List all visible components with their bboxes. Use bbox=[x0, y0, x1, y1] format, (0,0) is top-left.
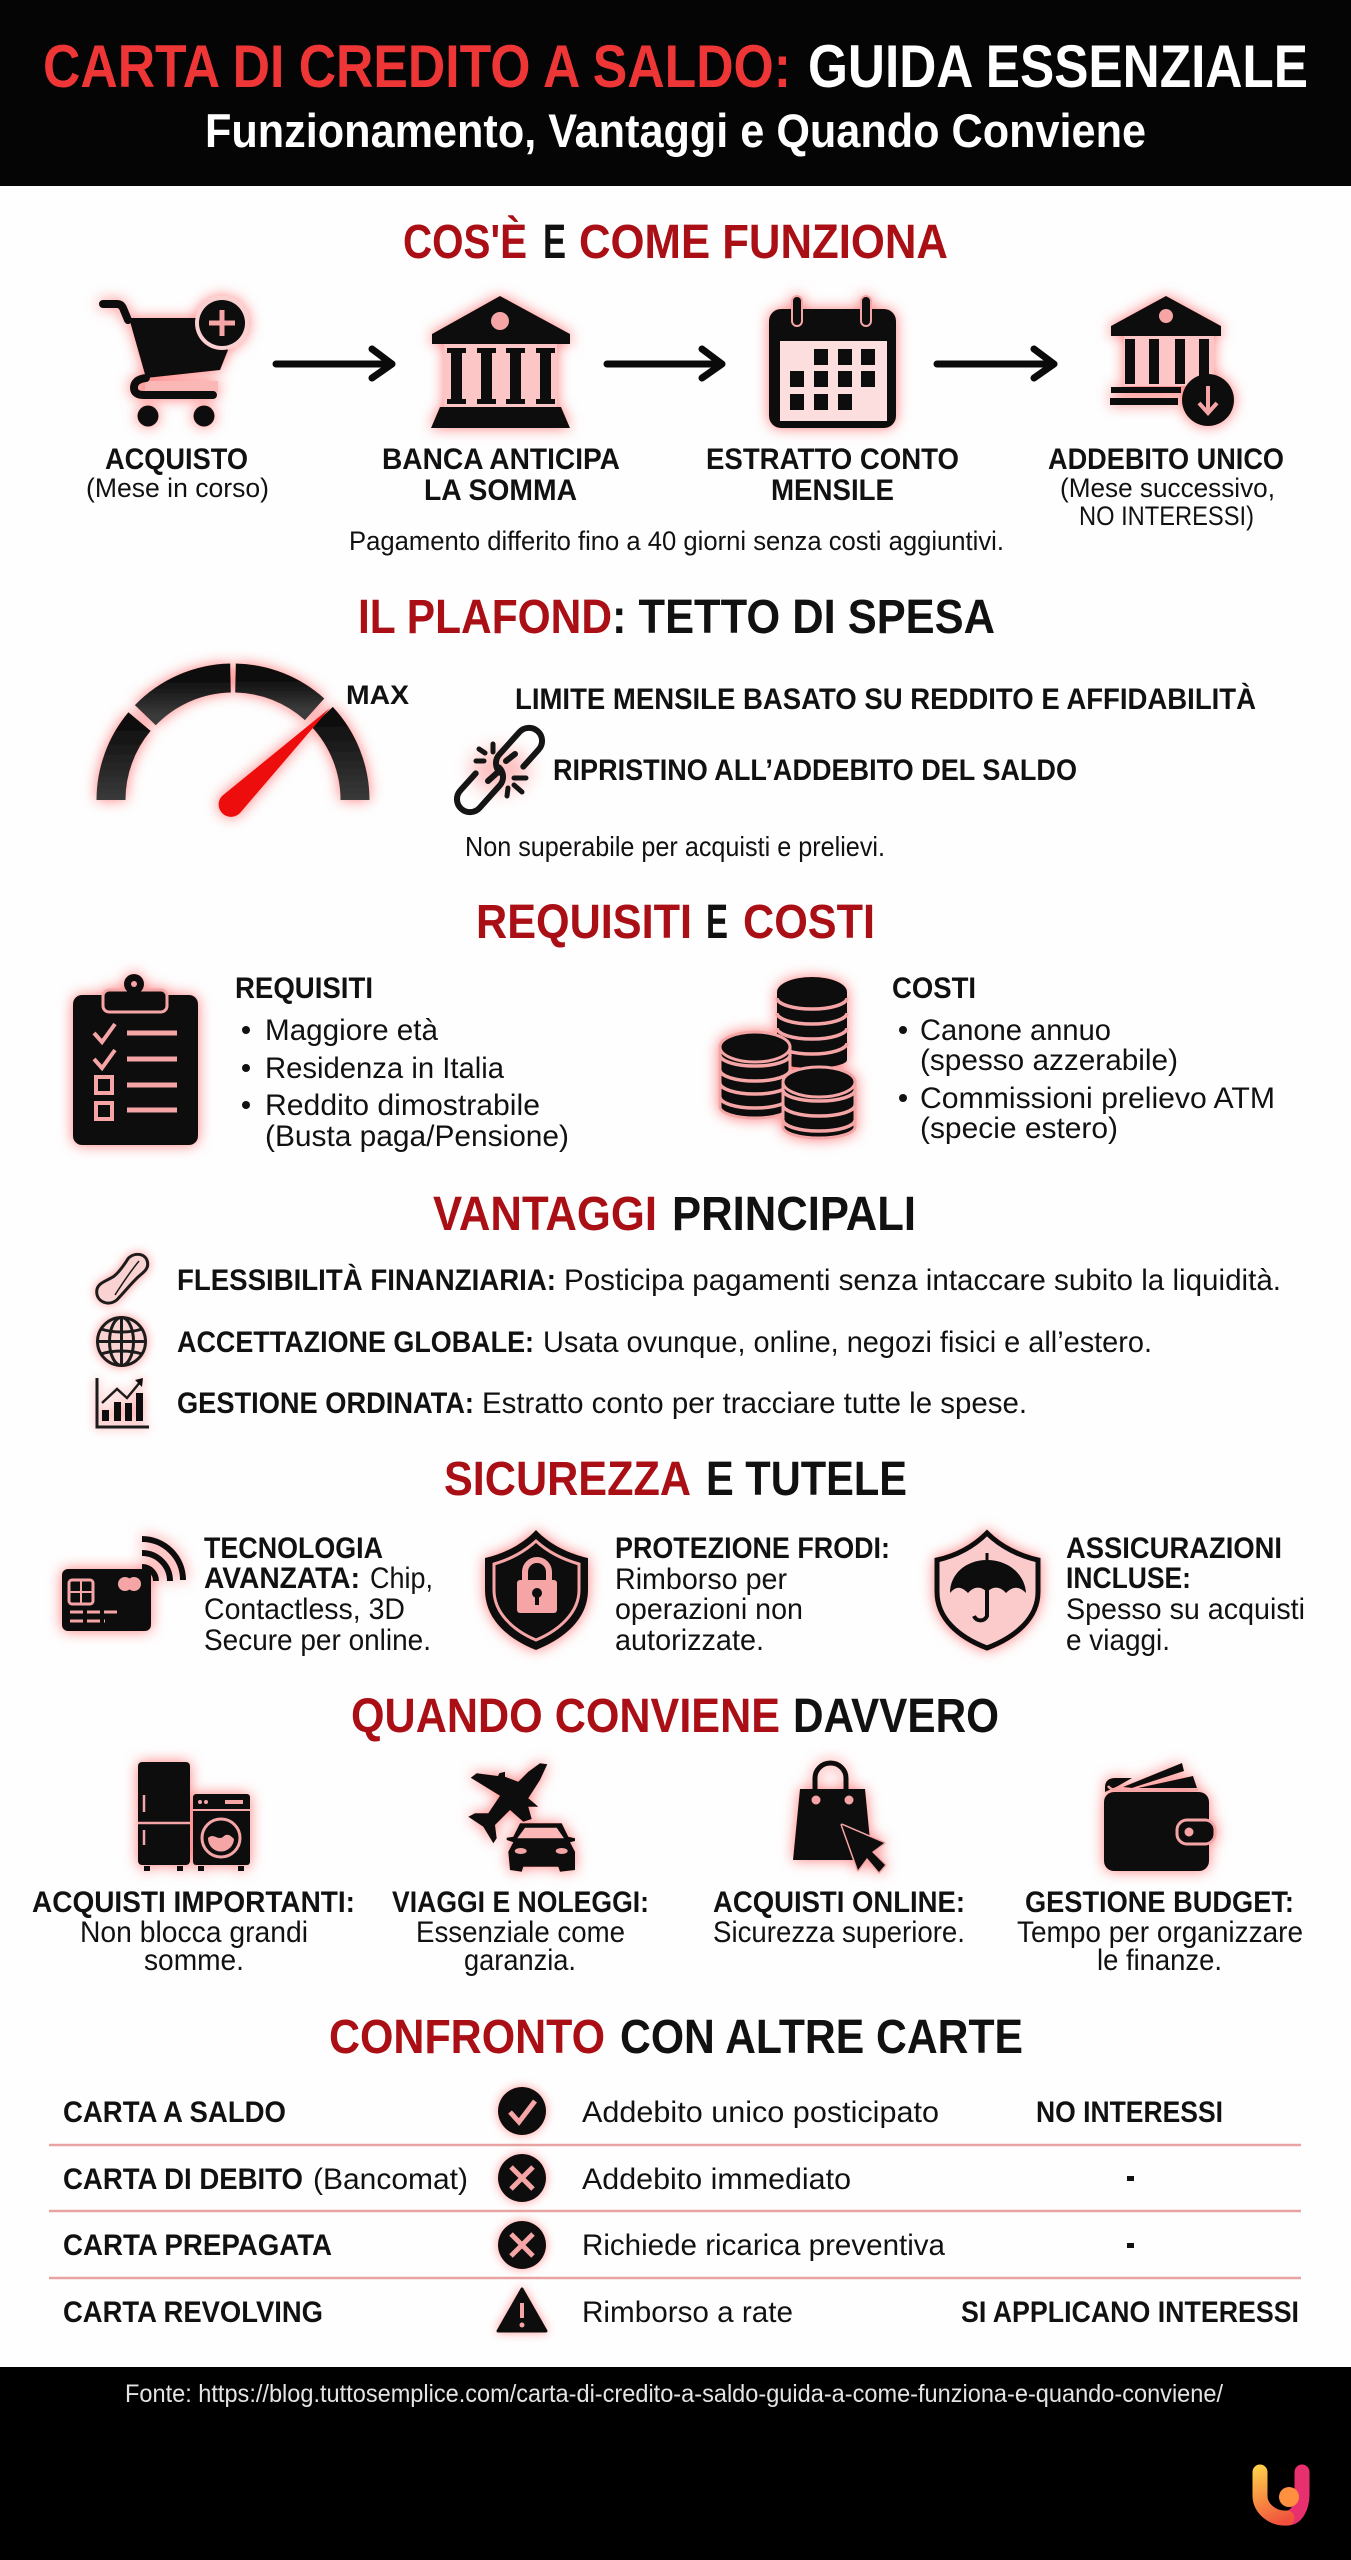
arrow bbox=[607, 349, 722, 378]
icon: bank with debit arrow bbox=[1110, 296, 1234, 426]
caption: acquisti importanti: ACQUISTI IMPORTANTI: bbox=[32, 1886, 355, 1919]
heading: plafond: : TETTO DI SPESA bbox=[612, 591, 995, 644]
icon: clipboard bbox=[73, 974, 198, 1145]
caption: acquisti online: Sicurezza superiore. bbox=[713, 1916, 965, 1949]
row: carta revolving bbox=[63, 2289, 1299, 2331]
icon: appliances bbox=[138, 1762, 250, 1871]
heading: sicurezza: SICUREZZA bbox=[444, 1453, 691, 1506]
costi list: Canone annuo bbox=[920, 1014, 1111, 1047]
caption: viaggi: garanzia. bbox=[464, 1944, 576, 1977]
requisiti list: Reddito dimostrabile bbox=[265, 1089, 540, 1122]
step: banca anticipa: LA SOMMA bbox=[424, 474, 577, 507]
heading: come funziona bbox=[403, 215, 948, 269]
step: addebito unico: (Mese successivo, bbox=[1060, 473, 1275, 503]
text: assicurazioni bbox=[1066, 1532, 1305, 1657]
step: estratto conto bbox=[706, 443, 959, 507]
text: tecnologia: AVANZATA: bbox=[204, 1562, 360, 1595]
heading: plafond: IL PLAFOND bbox=[358, 591, 612, 644]
heading: confronto bbox=[329, 2011, 1023, 2064]
caption: acquisti online: ACQUISTI ONLINE: bbox=[713, 1886, 965, 1919]
section: vantaggi bbox=[97, 1188, 1281, 1427]
row: carta a saldo: Addebito unico posticipato bbox=[582, 2096, 939, 2129]
caption: acquisti importanti: Non blocca grandi bbox=[80, 1916, 308, 1949]
heading: requisiti e costi: COSTI bbox=[743, 896, 875, 949]
caption: gestione budget bbox=[1017, 1886, 1303, 1977]
step: estratto conto: MENSILE bbox=[771, 474, 894, 507]
row: carta prepagata: CARTA PREPAGATA bbox=[63, 2229, 332, 2262]
row: carta di debito: Addebito immediato bbox=[582, 2163, 851, 2196]
text: protezione: autorizzate. bbox=[615, 1624, 764, 1657]
caption: gestione budget: GESTIONE BUDGET: bbox=[1025, 1886, 1294, 1919]
vantaggio: flessibilita: Posticipa pagamenti senza intaccare subito la liquidità. bbox=[564, 1264, 1281, 1297]
icon: bank bbox=[431, 296, 570, 428]
icon: warning bbox=[498, 2289, 546, 2331]
footer band bbox=[0, 2367, 1351, 2560]
step: addebito unico bbox=[1048, 443, 1284, 531]
text: tecnologia: Chip, bbox=[370, 1562, 433, 1595]
title bbox=[43, 33, 1308, 100]
costi list: COSTI bbox=[892, 972, 976, 1005]
source link: Fonte: https://blog.tuttosemplice.com/carta-di-credito-a-saldo-guida-a-come-funziona-e-quando-conviene/ bbox=[125, 2380, 1223, 2408]
icon: calendar bbox=[769, 296, 896, 428]
section: come funziona bbox=[86, 215, 1284, 556]
heading: come funziona: COS'È bbox=[403, 215, 527, 269]
heading: confronto: CONFRONTO bbox=[329, 2011, 605, 2064]
note: Pagamento differito fino a 40 giorni senza costi aggiuntivi. bbox=[349, 526, 1004, 556]
step: addebito unico: NO INTERESSI) bbox=[1079, 501, 1254, 531]
caption: acquisti online bbox=[713, 1886, 965, 1949]
step: banca anticipa bbox=[382, 443, 620, 507]
icon: cross bbox=[498, 2154, 546, 2202]
row: carta di debito: (Bancomat) bbox=[313, 2163, 468, 2196]
label: max: MAX bbox=[346, 680, 409, 710]
section: sicurezza bbox=[62, 1453, 1305, 1657]
logo bbox=[1260, 2472, 1302, 2518]
caption: viaggi: Essenziale come bbox=[416, 1916, 625, 1949]
row: carta revolving: CARTA REVOLVING bbox=[63, 2296, 323, 2329]
arrow bbox=[937, 349, 1054, 378]
text: tecnologia: Secure per online. bbox=[204, 1624, 431, 1657]
row: carta di debito: CARTA DI DEBITO bbox=[63, 2163, 303, 2196]
subtitle: Funzionamento, Vantaggi e Quando Conviene bbox=[205, 104, 1146, 157]
arrow bbox=[276, 349, 392, 378]
text: protezione bbox=[615, 1532, 890, 1657]
text: tecnologia: Contactless, 3D bbox=[204, 1593, 405, 1626]
heading: confronto: CON ALTRE CARTE bbox=[620, 2011, 1023, 2064]
row: carta prepagata: Richiede ricarica preventiva bbox=[582, 2229, 945, 2262]
title: CARTA DI CREDITO A SALDO: bbox=[43, 33, 791, 100]
icon: flexibility bbox=[97, 1254, 148, 1303]
requisiti list: Residenza in Italia bbox=[265, 1052, 504, 1085]
row: carta a saldo bbox=[63, 2087, 1223, 2135]
step: acquisto bbox=[86, 443, 269, 503]
step: banca anticipa: BANCA ANTICIPA bbox=[382, 443, 620, 476]
icon: check bbox=[498, 2087, 546, 2135]
heading: sicurezza bbox=[444, 1453, 907, 1506]
caption: viaggi: VIAGGI E NOLEGGI: bbox=[392, 1886, 649, 1919]
text: assicurazioni: e viaggi. bbox=[1066, 1624, 1170, 1657]
icon: shield umbrella bbox=[937, 1533, 1038, 1648]
caption: viaggi bbox=[392, 1886, 649, 1977]
row: carta a saldo: CARTA A SALDO bbox=[63, 2096, 286, 2129]
text: protezione: operazioni non bbox=[615, 1593, 803, 1626]
step: acquisto: (Mese in corso) bbox=[86, 473, 269, 503]
section: quando conviene bbox=[32, 1690, 1303, 1977]
step: addebito unico: ADDEBITO UNICO bbox=[1048, 443, 1284, 476]
heading: vantaggi: PRINCIPALI bbox=[672, 1188, 916, 1241]
text: assicurazioni: Spesso su acquisti bbox=[1066, 1593, 1305, 1626]
heading: sicurezza: E TUTELE bbox=[706, 1453, 907, 1506]
icon: shopping bag and cursor bbox=[793, 1763, 885, 1872]
heading: come funziona: E bbox=[543, 216, 566, 269]
heading: vantaggi bbox=[433, 1188, 916, 1241]
icon: globe bbox=[98, 1318, 146, 1366]
icon: shield lock bbox=[485, 1530, 588, 1650]
icon: cross bbox=[498, 2221, 546, 2269]
header band bbox=[0, 0, 1351, 186]
icon: wallet bbox=[1104, 1763, 1215, 1871]
text: assicurazioni: ASSICURAZIONI bbox=[1066, 1532, 1282, 1565]
text: assicurazioni: INCLUSE: bbox=[1066, 1562, 1191, 1595]
icon: gauge bbox=[111, 678, 355, 817]
heading: plafond bbox=[358, 591, 995, 644]
costi list: (spesso azzerabile) bbox=[920, 1044, 1178, 1077]
caption: gestione budget: Tempo per organizzare bbox=[1017, 1916, 1303, 1949]
heading: requisiti e costi: REQUISITI bbox=[476, 896, 692, 949]
caption: gestione budget: le finanze. bbox=[1097, 1944, 1222, 1977]
requisiti list: REQUISITI bbox=[235, 972, 373, 1005]
step: estratto conto: ESTRATTO CONTO bbox=[706, 443, 959, 476]
vantaggio: gestione bbox=[177, 1387, 1027, 1420]
caption: acquisti importanti: somme. bbox=[144, 1944, 244, 1977]
heading: quando conviene: QUANDO CONVIENE bbox=[351, 1690, 780, 1743]
heading: quando conviene: DAVVERO bbox=[793, 1690, 999, 1743]
vantaggio: flessibilita bbox=[177, 1263, 1281, 1297]
icon: coins bbox=[720, 977, 855, 1138]
costi list bbox=[892, 972, 1275, 1145]
heading: come funziona: COME FUNZIONA bbox=[579, 216, 948, 269]
vantaggio: accettazione bbox=[177, 1326, 1152, 1359]
icon: broken chain bbox=[452, 722, 547, 818]
step: acquisto: ACQUISTO bbox=[105, 443, 248, 476]
costi list: (specie estero) bbox=[920, 1112, 1118, 1145]
requisiti list bbox=[235, 972, 569, 1153]
row: carta revolving: Rimborso a rate bbox=[582, 2296, 793, 2329]
section: confronto bbox=[49, 2011, 1301, 2331]
requisiti list: Maggiore età bbox=[265, 1014, 438, 1047]
text: protezione: PROTEZIONE FRODI: bbox=[615, 1532, 890, 1565]
icon: plane and car bbox=[468, 1763, 575, 1872]
text: tecnologia: TECNOLOGIA bbox=[204, 1532, 383, 1565]
heading: requisiti e costi: E bbox=[706, 896, 728, 949]
vantaggio: accettazione: ACCETTAZIONE GLOBALE: bbox=[177, 1326, 534, 1359]
vantaggio: gestione: GESTIONE ORDINATA: bbox=[177, 1387, 474, 1420]
icon: chart bbox=[97, 1378, 149, 1427]
plafond note: Non superabile per acquisti e prelievi. bbox=[465, 831, 885, 862]
icon: contactless card bbox=[62, 1539, 183, 1631]
icon: cart bbox=[103, 296, 249, 426]
vantaggio: flessibilita: FLESSIBILITÀ FINANZIARIA: bbox=[177, 1263, 556, 1297]
costi list: Commissioni prelievo ATM bbox=[920, 1082, 1275, 1115]
row: carta a saldo: NO INTERESSI bbox=[1036, 2096, 1223, 2129]
requisiti list: (Busta paga/Pensione) bbox=[265, 1120, 569, 1153]
vantaggio: gestione: Estratto conto per tracciare tutte le spese. bbox=[482, 1387, 1027, 1420]
plafond limit text: LIMITE MENSILE BASATO SU REDDITO E AFFIDABILITÀ bbox=[515, 682, 1256, 716]
heading: requisiti e costi bbox=[476, 896, 875, 949]
section: requisiti e costi bbox=[73, 896, 1275, 1153]
heading: vantaggi: VANTAGGI bbox=[433, 1188, 657, 1241]
row: carta prepagata bbox=[63, 2221, 1134, 2269]
row: carta di debito bbox=[63, 2154, 1134, 2202]
text: protezione: Rimborso per bbox=[615, 1563, 787, 1596]
plafond restore text: RIPRISTINO ALL’ADDEBITO DEL SALDO bbox=[553, 754, 1077, 787]
caption: acquisti importanti bbox=[32, 1886, 355, 1977]
vantaggio: accettazione: Usata ovunque, online, negozi fisici e all’estero. bbox=[543, 1326, 1152, 1359]
row: carta revolving: SI APPLICANO INTERESSI bbox=[961, 2296, 1299, 2329]
text: tecnologia bbox=[204, 1532, 433, 1657]
section: plafond bbox=[111, 591, 1256, 862]
